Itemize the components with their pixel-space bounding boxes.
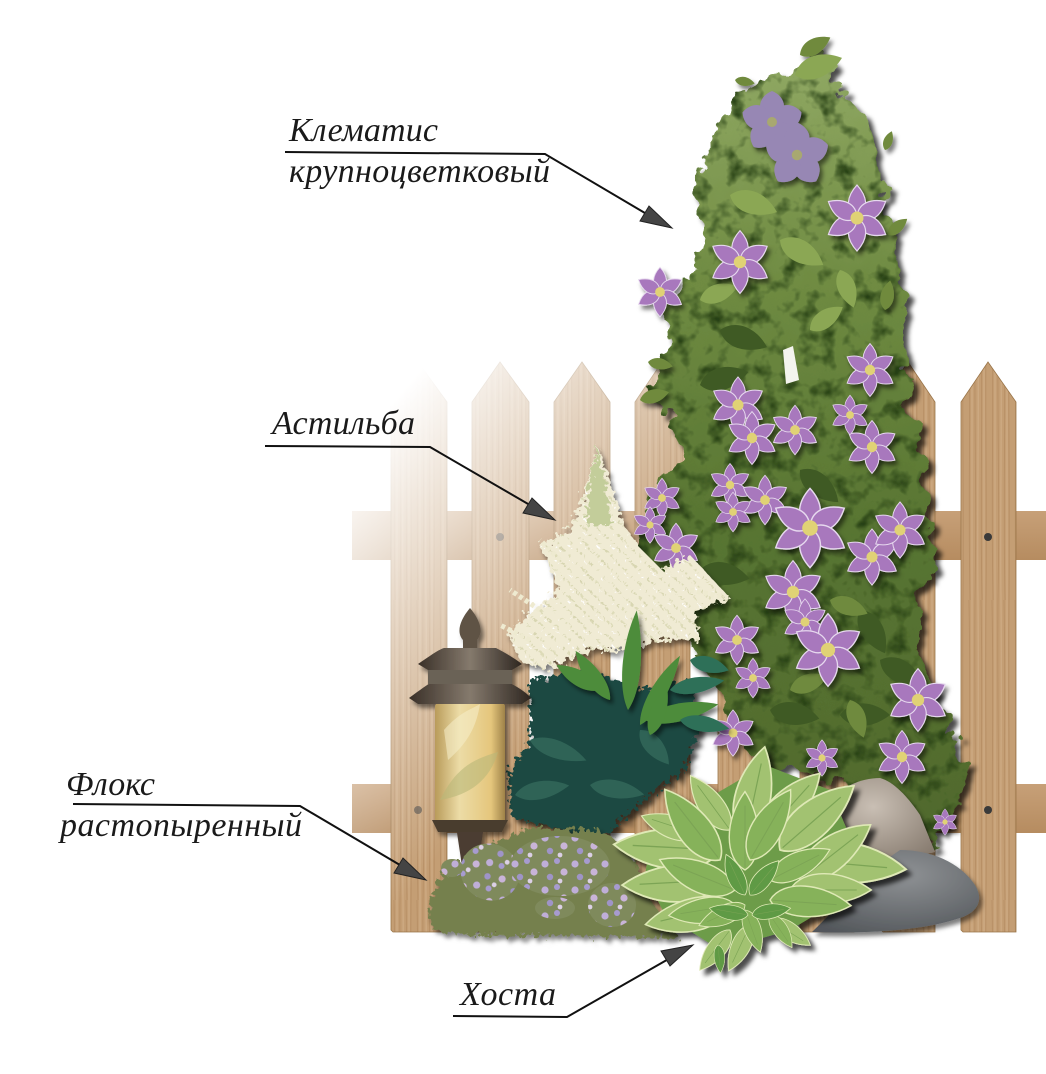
phlox leader [73,804,405,868]
astilbe dark foliage [508,670,700,832]
plant: clematis [632,30,968,850]
rocks [812,778,979,932]
clematis flowers [632,91,958,835]
hosta front leaves [651,780,852,955]
phlox mound [428,828,680,938]
label: clematis [285,112,672,228]
fence pickets [391,362,1016,932]
clematis leaves [697,47,929,741]
label: hosta [453,945,693,1017]
label: astilbe [265,405,555,520]
plant: astilbe [500,445,731,832]
phlox text: Флокс [66,766,155,803]
astilbe upper leaves [553,610,731,738]
plant: creeping phlox [428,828,680,938]
astilbe arrow [523,498,555,520]
label: clematis: крупноцветковый [289,153,550,190]
phlox flowers [441,833,636,927]
clematis text: Клематис [288,112,438,149]
astilbe leader [265,446,535,508]
lantern finial [459,608,481,648]
label: phlox: растопыренный [58,807,302,844]
fence rails [352,511,1046,833]
astilbe plume [508,445,730,670]
hosta centre leaves [708,851,792,973]
clematis foliage [640,42,968,850]
astilbe side fronds [500,540,730,640]
plant: hosta [613,743,908,976]
hosta arrow [661,945,693,966]
clematis trellis gap [783,346,799,384]
lantern roof [409,682,531,704]
clematis detached leaves [638,30,911,406]
beige rock [832,778,935,860]
lantern glass [435,702,505,824]
hosta leader [453,957,672,1017]
picket fence [352,362,1046,932]
grey rock [812,850,979,932]
hosta text: Хоста [458,976,556,1013]
label: phlox [58,766,426,880]
hosta back leaves [613,743,908,976]
astilbe text: Астильба [270,405,415,442]
hosta base [645,765,860,950]
lantern post [456,826,484,866]
clematis leader [285,152,650,216]
clematis arrow [640,206,672,228]
garden lantern [409,608,531,866]
phlox arrow [394,858,426,880]
fence nails [414,533,992,814]
astilbe green tip [586,445,612,525]
